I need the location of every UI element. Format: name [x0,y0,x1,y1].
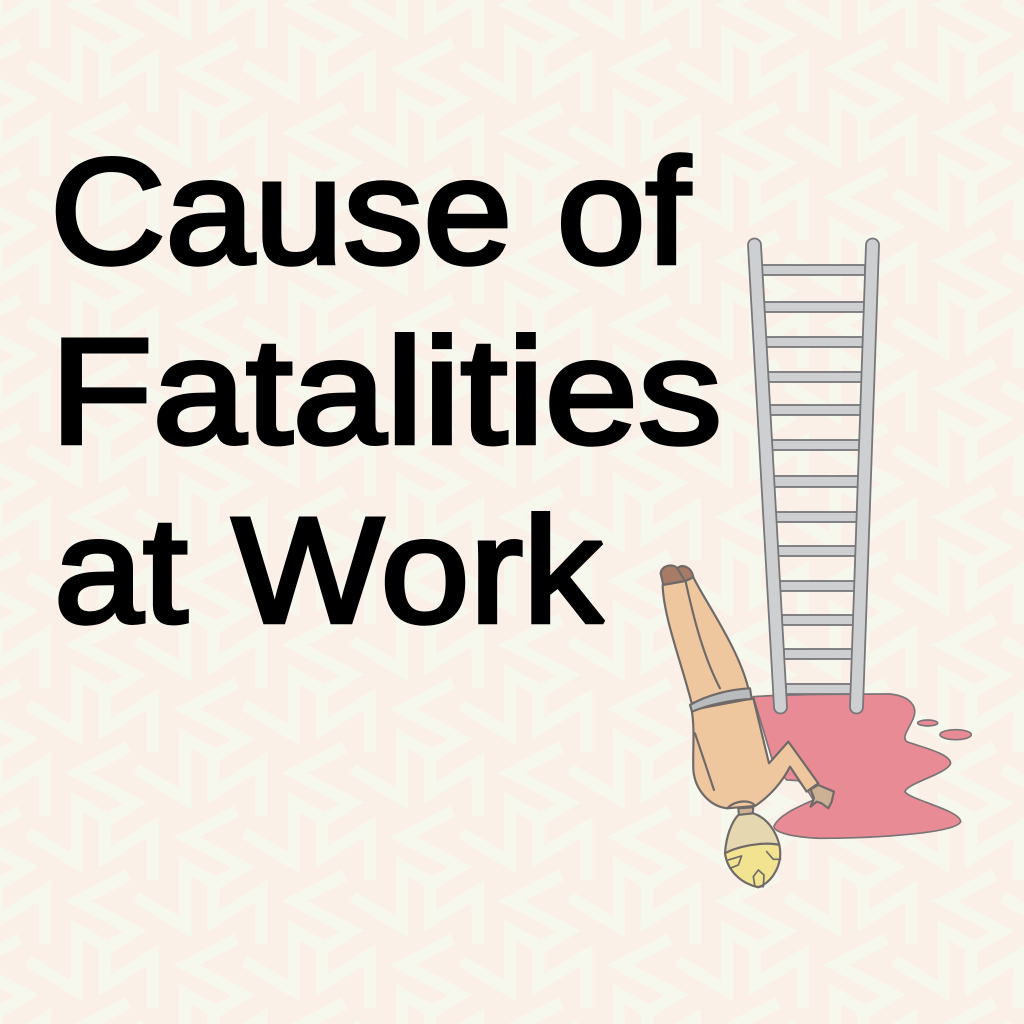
title: at Work [54,486,604,654]
illustration: blood pool [753,694,971,838]
neck [738,807,753,816]
illustration: ladder [748,239,879,714]
helmet [725,844,780,887]
legs [663,577,748,703]
illustration: fallen worker [661,566,834,887]
head cover [725,813,779,853]
title: Fatalities [50,307,722,475]
helmet details [728,852,781,887]
shoes [661,566,693,585]
hand [811,785,834,808]
torso and arm [692,698,818,808]
title: Cause of [50,127,690,295]
belt [690,688,752,712]
title [50,127,722,654]
leg and torso seams [686,582,755,808]
